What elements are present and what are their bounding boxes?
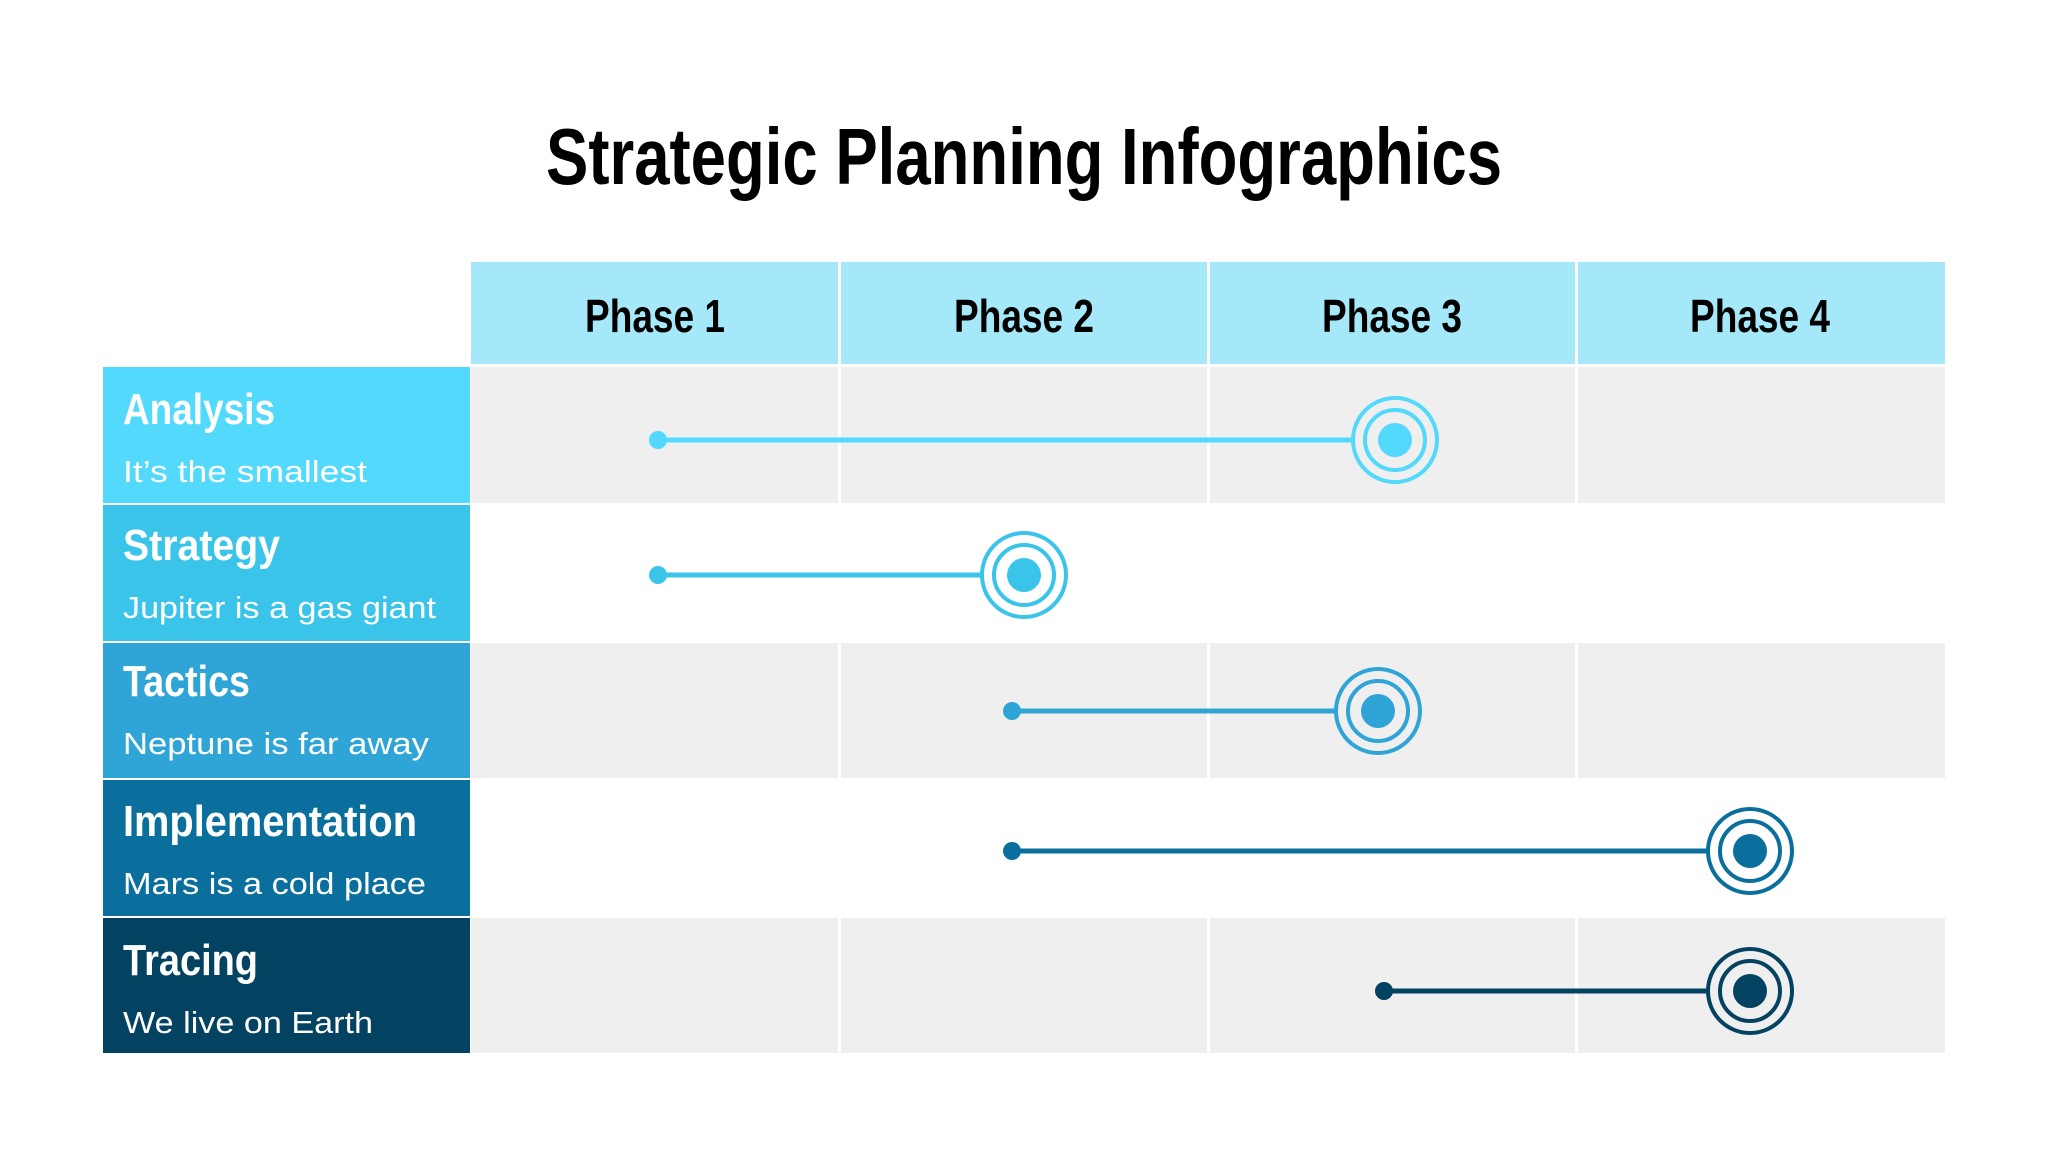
- timeline: Strategy: [649, 533, 1066, 617]
- row label: Strategy: Strategy: [123, 521, 280, 570]
- row label: Tactics: [103, 643, 470, 778]
- header row: phases: Phase 2: [954, 290, 1094, 342]
- row label: Implementation: Mars is a cold place: [123, 866, 426, 901]
- header row: phases: Phase 1: [585, 290, 725, 342]
- row label: Tracing: We live on Earth: [123, 1005, 373, 1040]
- row label: Tactics: Tactics: [123, 657, 250, 706]
- header row: phases: Phase 4: [1690, 290, 1830, 342]
- row label: Tactics: Neptune is far away: [123, 726, 430, 761]
- row label: Strategy: [103, 505, 470, 641]
- table background rows: [471, 367, 1945, 1053]
- row label: Implementation: [103, 780, 470, 916]
- timeline: Tracing: [1375, 949, 1792, 1033]
- title: Strategic Planning Infographics: [546, 112, 1502, 201]
- timeline: Tactics: [1003, 669, 1420, 753]
- row label: Strategy: Jupiter is a gas giant: [123, 590, 436, 625]
- header row: phases: Phase 3: [1322, 290, 1462, 342]
- timeline: Analysis: [649, 398, 1437, 482]
- header row: phases: [471, 262, 1945, 364]
- row label: Tracing: Tracing: [123, 936, 258, 985]
- row label: Tracing: [103, 918, 470, 1053]
- timeline: Implementation: [1003, 809, 1792, 893]
- row label: Analysis: [103, 367, 470, 503]
- row label: Analysis: It’s the smallest: [123, 454, 367, 489]
- row label: Analysis: Analysis: [123, 385, 275, 434]
- row label: Implementation: Implementation: [123, 797, 417, 846]
